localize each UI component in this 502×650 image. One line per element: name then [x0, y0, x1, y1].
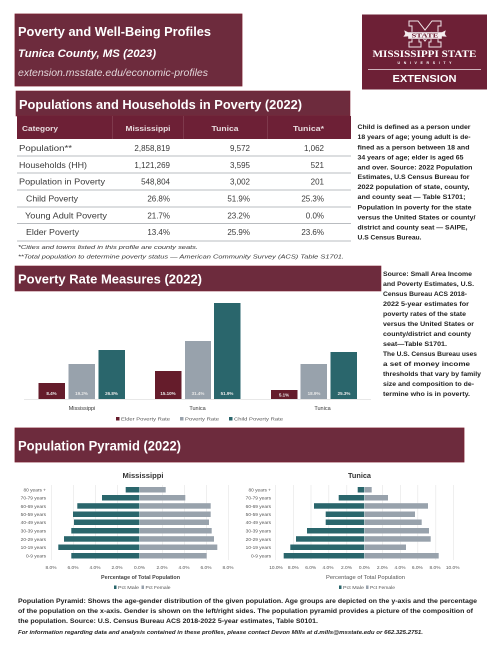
percent axis labels: 4.0%	[395, 565, 406, 571]
bars: Mississippi: 26.8%	[105, 391, 118, 396]
percent axis labels: 0.0%	[359, 565, 370, 571]
age axis labels: 70-79 years	[246, 496, 272, 502]
pyramid legend: Pct Female	[146, 585, 171, 591]
row: young adult poverty: 21.7%	[147, 212, 170, 220]
panel: population pyramid heading	[15, 428, 464, 462]
row: population in poverty	[19, 178, 325, 186]
side note: definitions and sources: and over. Source: 2022 Population	[358, 164, 473, 172]
table header row	[17, 116, 351, 139]
age axis labels: 30-39 years	[246, 528, 272, 534]
chart legend: Elder Poverty Rate	[121, 416, 171, 422]
row: households	[19, 161, 325, 170]
row: child poverty: Child Poverty	[26, 194, 78, 204]
row: young adult poverty: 0.0%	[306, 212, 324, 220]
table footnotes: *Cities and towns listed in this profile are county seats.	[18, 245, 198, 251]
row: population in poverty: 548,804	[141, 178, 171, 186]
row: households: 521	[311, 161, 325, 170]
side note: poverty rate source: versus the United States or	[383, 321, 475, 328]
age axis labels: 10-19 years	[21, 545, 47, 551]
pyramid legend: Pct Male	[343, 585, 364, 591]
percent axis labels	[269, 565, 460, 571]
side note: poverty rate source: Census Bureau ACS 2018-	[383, 291, 467, 298]
icon: M emblem: STATE	[412, 34, 438, 40]
percent axis labels: 2.0%	[157, 565, 168, 571]
age axis labels: 0-9 years	[26, 554, 47, 560]
side note: definitions and sources	[358, 124, 476, 242]
pyramid legend	[339, 585, 395, 591]
age axis labels: 30-39 years	[21, 528, 47, 534]
bars: Mississippi: 19.2%	[75, 391, 88, 396]
side note: poverty rate source	[383, 271, 481, 398]
age axis labels: 20-29 years	[21, 537, 47, 543]
row: elder poverty: 25.9%	[227, 228, 250, 237]
row: elder poverty: 13.4%	[147, 228, 170, 237]
percent axis labels: 10.0%	[446, 565, 460, 571]
percent axis labels: 8.0%	[46, 565, 57, 571]
age axis labels: 40-49 years	[246, 520, 272, 526]
row: population in poverty: 201	[311, 178, 325, 186]
age axis labels: 70-79 years	[21, 496, 47, 502]
age axis labels: 10-19 years	[246, 545, 272, 551]
side note: definitions and sources: district and county seat — SAIPE,	[358, 224, 468, 232]
side note: poverty rate source: 2022 5-year estimates for	[383, 301, 470, 308]
age axis labels: 60-69 years	[21, 504, 47, 510]
percent axis labels: 2.0%	[377, 565, 388, 571]
side note: definitions and sources: 2022 population of state, county,	[358, 184, 470, 191]
percent axis labels: 6.0%	[305, 565, 317, 571]
bars: Tunica county: 51.9%	[221, 391, 233, 396]
row: child poverty: 26.8%	[147, 194, 170, 204]
table header row: Tunica*	[293, 124, 324, 133]
row: households: 1,121,269	[134, 161, 171, 170]
age axis labels: 50-59 years	[21, 512, 47, 518]
table header row: Category	[22, 124, 59, 133]
percent axis labels: 8.0%	[430, 565, 441, 571]
logo: Mississippi State University Extension: MISSISSIPPI STATE	[372, 50, 476, 60]
chart legend: Child Poverty Rate	[234, 416, 284, 422]
text block: population pyramid explanation: Population Pyramid: Shows the age-gender distribution of the given population. Age groups are depicted on the y-axis and the percentage	[18, 598, 477, 605]
title: Poverty and Well-Being Profiles	[18, 25, 211, 39]
male bars	[58, 487, 139, 558]
bars: Tunica town: 5.1%	[279, 392, 289, 398]
row: population in poverty: 3,002	[230, 178, 251, 186]
side note: definitions and sources: 34 years of age; elder is aged 65	[358, 154, 464, 162]
percent axis labels: 6.0%	[68, 565, 79, 571]
percent axis labels: 6.0%	[201, 565, 212, 571]
side note: definitions and sources: Child is defined as a person under	[358, 124, 471, 131]
percent axis labels: 10.0%	[269, 565, 284, 571]
row: elder poverty: 23.6%	[301, 228, 324, 237]
county subtitle: Tunica County, MS (2023)	[18, 48, 156, 60]
panel: populations and households heading: Populations and Households in Poverty (2022)	[19, 98, 302, 112]
axis title: Percentage of Total Population	[101, 575, 180, 581]
row: young adult poverty: 23.2%	[227, 212, 250, 220]
bars: Tunica town	[271, 352, 357, 412]
percent axis labels: 4.0%	[179, 565, 190, 571]
bars: Tunica county	[155, 303, 240, 412]
bars: Tunica county: 15.10%	[160, 391, 176, 396]
row: elder poverty	[26, 228, 324, 237]
row: population	[19, 144, 325, 153]
side note: poverty rate source: a set of money income	[383, 361, 471, 368]
side note: poverty rate source: thresholds that vary by family	[383, 371, 481, 378]
row: households: 3,595	[230, 161, 251, 170]
bar chart: poverty rate measures	[24, 303, 371, 422]
text block: population pyramid explanation	[18, 598, 477, 625]
row: child poverty	[26, 194, 324, 204]
percent axis labels: 2.0%	[341, 565, 353, 571]
age axis labels: 20-29 years	[246, 537, 272, 543]
website: extension.msstate.edu/economic-profiles	[18, 68, 208, 79]
bars: Tunica town: 25.3%	[338, 391, 350, 396]
logo: Mississippi State University Extension: EXTENSION	[392, 74, 456, 85]
side note: poverty rate source: The U.S. Census Bureau uses	[383, 351, 477, 358]
row: population: 2,858,819	[134, 144, 171, 153]
row: households: Households (HH)	[19, 161, 87, 170]
header panel: title block	[15, 14, 242, 86]
table header row: Mississippi	[126, 124, 170, 133]
text block: population pyramid explanation: of the population on the x-axis. Gender is shown on the left/right sides. The population pyramid provides a picture of the composition of	[18, 608, 474, 615]
logo: Mississippi State University Extension: UNIVERSITY	[398, 61, 452, 65]
table: populations and households in poverty	[17, 116, 351, 242]
chart: Tunica population pyramid	[246, 471, 460, 591]
row: child poverty: 51.9%	[227, 194, 250, 204]
bars: Tunica town: Tunica	[314, 406, 332, 412]
row: child poverty: 25.3%	[301, 194, 324, 204]
female bars	[365, 487, 439, 558]
age axis labels: 60-69 years	[246, 504, 272, 510]
side note: poverty rate source: termine who is in poverty.	[383, 391, 470, 398]
percent axis labels: 6.0%	[412, 565, 423, 571]
panel: poverty rate measures heading: Poverty Rate Measures (2022)	[18, 272, 202, 286]
bars: Tunica county: 31.4%	[192, 391, 204, 396]
side note: definitions and sources: U.S Census Bureau.	[358, 234, 422, 242]
side note: definitions and sources: versus the United States or county/	[358, 214, 476, 222]
side note: poverty rate source: poverty rates of the state	[383, 311, 466, 318]
logo: Mississippi State University Extension	[362, 14, 487, 90]
chart: Mississippi population pyramid	[21, 471, 234, 591]
row: elder poverty: Elder Poverty	[26, 228, 79, 237]
chart legend: Poverty Rate	[185, 416, 220, 422]
side note: poverty rate source: seat—Table S1701.	[383, 341, 447, 348]
side note: definitions and sources: Population in poverty for the state	[358, 204, 472, 212]
side note: definitions and sources: fined as a person between 18 and	[358, 144, 470, 152]
percent axis labels: 0.0%	[134, 565, 146, 571]
text block: population pyramid explanation: the population. Source: U.S. Census Bureau ACS 2018-2022 5-year estimates, Table S0101.	[18, 618, 318, 625]
table footnotes	[18, 245, 344, 260]
percent axis labels: 8.0%	[223, 565, 234, 571]
side note: definitions and sources: and county seat — Table S1701;	[358, 194, 466, 201]
side note: poverty rate source: county/district and county	[383, 331, 471, 338]
row: young adult poverty: Young Adult Poverty	[25, 212, 107, 220]
bars: Mississippi: 8.4%	[46, 391, 57, 396]
row: population in poverty: Population in Poverty	[19, 178, 105, 186]
panel: population pyramid heading: Population Pyramid (2022)	[18, 438, 181, 454]
chart legend	[116, 416, 284, 422]
chart title: Tunica	[348, 471, 372, 480]
row: population: Population**	[19, 144, 72, 153]
row: young adult poverty	[25, 212, 324, 220]
side note: poverty rate source: and Poverty Estimates, U.S.	[383, 281, 474, 288]
row: population: 1,062	[304, 144, 325, 153]
pyramid legend: Pct Female	[370, 585, 395, 591]
bars: Tunica town: 18.9%	[308, 391, 320, 396]
percent axis labels	[46, 565, 234, 571]
side note: poverty rate source: size and composition to de-	[383, 381, 474, 388]
row: population: 9,572	[230, 144, 251, 153]
age axis labels: 80 years +	[23, 488, 46, 494]
pyramid legend: Pct Male	[118, 585, 139, 591]
age axis labels	[21, 488, 47, 560]
side note: definitions and sources: Estimates, U.S Census Bureau for	[358, 174, 470, 181]
female bars	[140, 487, 217, 558]
percent axis labels: 4.0%	[90, 565, 101, 571]
bars: Tunica county: Tunica	[189, 406, 207, 412]
side note: poverty rate source: Source: Small Area Income	[383, 271, 472, 278]
panel: poverty rate measures heading	[15, 266, 381, 291]
table header row: Tunica	[212, 124, 239, 133]
panel: populations and households heading	[16, 91, 350, 116]
percent axis labels: 4.0%	[323, 565, 334, 571]
side note: definitions and sources: 18 years of age; young adult is de-	[358, 134, 470, 141]
percent axis labels: 2.0%	[112, 565, 123, 571]
bars: Mississippi	[38, 350, 125, 412]
age axis labels: 80 years +	[248, 488, 271, 494]
table footnotes: **Total population to determine poverty status — American Community Survey (ACS) Table S1701.	[18, 254, 344, 260]
male bars	[284, 487, 364, 558]
age axis labels: 40-49 years	[21, 520, 47, 526]
age axis labels	[246, 488, 272, 560]
chart title: Mississippi	[122, 471, 164, 480]
age axis labels: 0-9 years	[251, 554, 272, 560]
age axis labels: 50-59 years	[246, 512, 272, 518]
pyramid legend	[114, 585, 171, 591]
axis title: Percentage of Total Population	[326, 575, 405, 581]
bars: Mississippi: Mississippi	[69, 406, 95, 412]
percent axis labels: 8.0%	[288, 565, 299, 571]
contact line: For information regarding data and analysis contained in these profiles, please contact Devon Mills at d.mills@msstate.edu or 662.325.2751.	[18, 630, 423, 636]
